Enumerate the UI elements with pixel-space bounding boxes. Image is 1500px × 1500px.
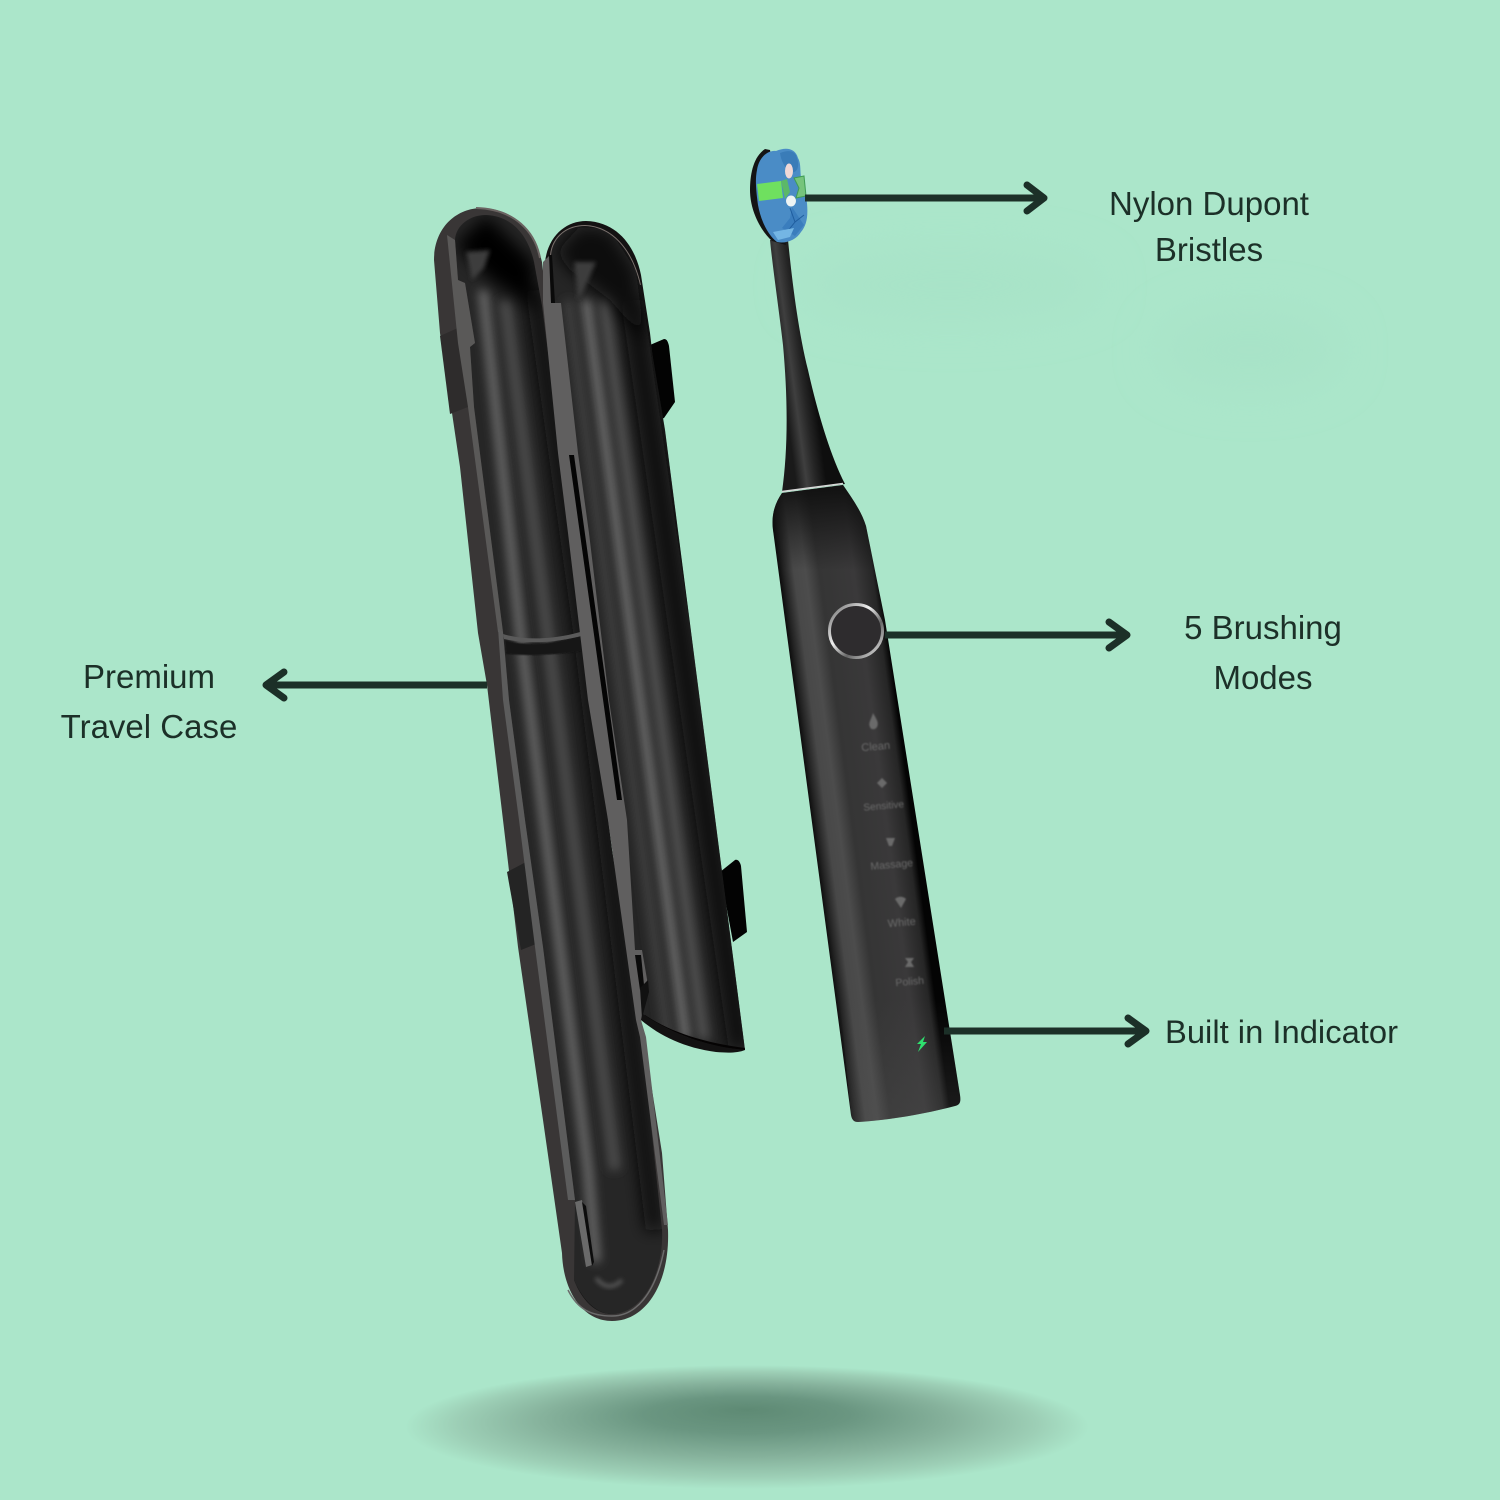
arrow: travel case xyxy=(266,672,487,698)
arrow: brushing modes xyxy=(885,622,1127,648)
mode icons and labels xyxy=(861,713,925,989)
mode icons and labels: White xyxy=(887,916,916,930)
gray rim strips xyxy=(447,235,503,632)
mode icons and labels: Sensitive xyxy=(863,799,905,814)
label: 5 Brushing Modes: 5 Brushing xyxy=(1184,609,1342,646)
toothbrush xyxy=(750,149,960,1122)
arrow: indicator xyxy=(944,1018,1146,1044)
mode icons and labels: Massage xyxy=(870,857,914,873)
toothbrush head xyxy=(750,149,807,245)
mode icons and labels: Clean xyxy=(861,740,891,754)
case: left half shell xyxy=(434,200,680,1330)
power button xyxy=(830,604,882,658)
arrow: bristles xyxy=(805,185,1044,211)
label: Built in Indicator: Built in Indicator xyxy=(1165,1013,1398,1050)
label: Premium Travel Case: Travel Case xyxy=(61,708,237,745)
toothbrush neck xyxy=(770,240,845,492)
label: Nylon Dupont Bristles: Bristles xyxy=(1155,231,1263,268)
charging indicator xyxy=(917,1036,927,1052)
label: Premium Travel Case: Premium xyxy=(83,658,215,695)
travel case xyxy=(434,200,760,1330)
case: right half shell xyxy=(540,215,760,1055)
toothbrush handle xyxy=(772,485,960,1122)
toothbrush collar line xyxy=(782,484,843,492)
infographic canvas xyxy=(61,148,1398,1484)
label: 5 Brushing Modes: Modes xyxy=(1213,659,1313,696)
label: Nylon Dupont Bristles: Nylon Dupont xyxy=(1109,185,1309,222)
floor shadow xyxy=(405,1365,1089,1489)
mode icons and labels: Polish xyxy=(895,975,925,989)
